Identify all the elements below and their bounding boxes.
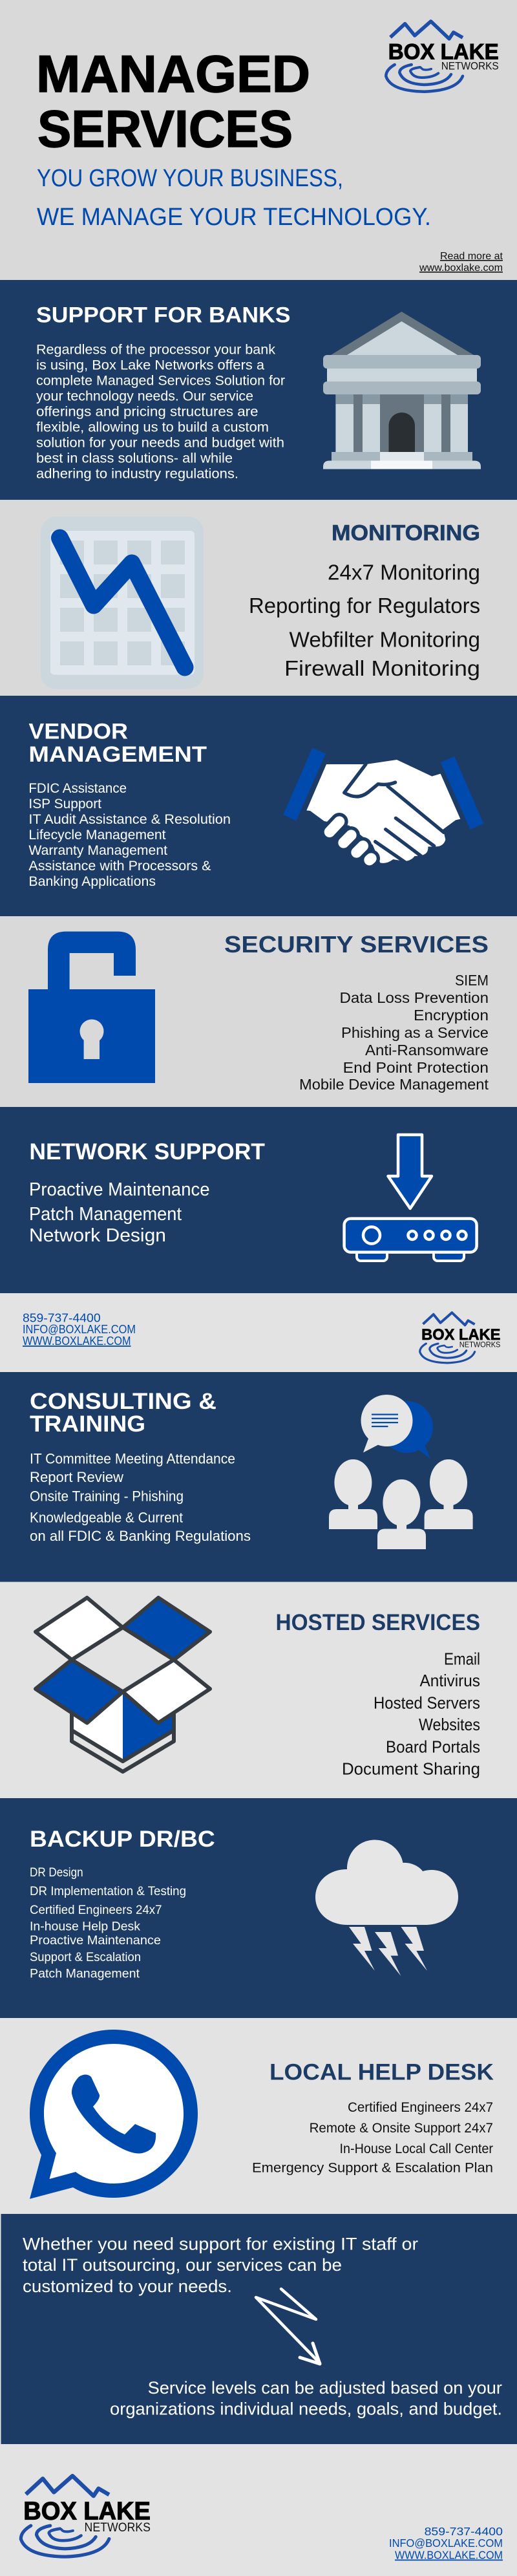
tagline: YOU GROW YOUR BUSINESS, xyxy=(37,165,343,192)
tagline: WE MANAGE YOUR TECHNOLOGY. xyxy=(37,204,431,231)
closing text: customization xyxy=(23,2235,418,2296)
service list: Encryption xyxy=(414,1007,489,1024)
contact details: INFO@BOXLAKE.COM xyxy=(23,1323,136,1336)
body text: offerings and pricing structures are xyxy=(36,405,258,419)
service list: Certified Engineers 24x7 xyxy=(30,1903,162,1917)
icon: router with download arrow xyxy=(344,1135,477,1261)
service list: Data Loss Prevention xyxy=(340,989,489,1006)
service list: Reporting for Regulators xyxy=(249,594,480,618)
panel: footer xyxy=(0,2444,517,2576)
service list: Websites xyxy=(419,1715,480,1734)
service list: Patch Management xyxy=(30,1966,140,1980)
service list: Antivirus xyxy=(420,1671,480,1690)
panel: vendor management xyxy=(0,696,517,916)
service list: Board Portals xyxy=(386,1737,480,1757)
service list xyxy=(30,1451,251,1544)
read more link xyxy=(419,251,503,274)
heading: SECURITY SERVICES xyxy=(224,931,489,958)
service list: In-House Local Call Center xyxy=(340,2141,493,2156)
closing text: service levels: Service levels can be adjusted based on your xyxy=(148,2378,502,2398)
title: SERVICES xyxy=(37,100,293,158)
icon: phone speech bubble xyxy=(30,2030,198,2199)
closing text: customization: customized to your needs. xyxy=(23,2277,232,2296)
logo: Box Lake Networks footer: NETWORKS xyxy=(85,2521,151,2535)
service list: Remote & Onsite Support 24x7 xyxy=(310,2121,493,2136)
service list: Support & Escalation xyxy=(30,1950,141,1964)
icon: handshake xyxy=(283,748,483,863)
heading: NETWORK SUPPORT xyxy=(29,1139,265,1165)
service list: Proactive Maintenance xyxy=(30,1933,161,1948)
panel: support for banks xyxy=(0,280,517,500)
panel: security services xyxy=(0,916,517,1107)
service list: Proactive Maintenance xyxy=(29,1179,209,1200)
service list: Hosted Servers xyxy=(374,1693,480,1712)
logo: Box Lake Networks: NETWORKS xyxy=(441,61,499,72)
closing text: service levels: organizations individual needs, goals, and budget. xyxy=(110,2399,502,2419)
service list: Onsite Training - Phishing xyxy=(30,1488,184,1504)
heading: MONITORING xyxy=(332,521,480,545)
service list: Assistance with Processors & xyxy=(28,859,211,874)
service list: Patch Management xyxy=(29,1204,182,1225)
read more link: Read more at xyxy=(440,251,503,262)
service list: Lifecycle Management xyxy=(28,828,166,843)
service list xyxy=(299,972,489,1093)
panel: local help desk xyxy=(0,2018,517,2214)
logo: Box Lake Networks xyxy=(386,21,499,92)
body text: best in class solutions- all while xyxy=(36,451,233,466)
service list xyxy=(249,561,480,681)
contact details xyxy=(389,2525,503,2562)
contact details: INFO@BOXLAKE.COM xyxy=(389,2537,503,2549)
service list: Warranty Management xyxy=(28,843,167,858)
service list: ISP Support xyxy=(28,797,101,811)
service list: Email xyxy=(444,1649,480,1668)
panel: monitoring xyxy=(0,500,517,696)
logo: Box Lake Networks small xyxy=(420,1313,501,1363)
heading xyxy=(28,720,207,767)
title xyxy=(36,45,310,158)
service list: DR Design xyxy=(30,1865,83,1880)
contact details: 859-737-4400 xyxy=(425,2525,503,2538)
logo: Box Lake Networks: BOX LAKE xyxy=(388,40,499,65)
panel: header xyxy=(0,0,517,280)
service list: IT Audit Assistance & Resolution xyxy=(28,812,231,827)
service list: Banking Applications xyxy=(28,874,156,889)
body text: complete Managed Services Solution for xyxy=(36,374,285,388)
service list xyxy=(252,2100,493,2175)
service list: DR Implementation & Testing xyxy=(30,1884,186,1898)
icon: bank building xyxy=(323,312,481,469)
body text: solution for your needs and budget with xyxy=(36,436,284,450)
body text xyxy=(36,343,285,481)
logo: Box Lake Networks small: NETWORKS xyxy=(459,1341,501,1349)
service list: IT Committee Meeting Attendance xyxy=(30,1451,235,1466)
service list: Knowledgeable & Current xyxy=(30,1509,183,1526)
service list: 24x7 Monitoring xyxy=(328,561,480,585)
body text: is using, Box Lake Networks offers a xyxy=(36,358,264,372)
heading xyxy=(30,1389,216,1437)
service list xyxy=(30,1865,186,1980)
panel: contact strip xyxy=(0,1293,517,1372)
service list: Anti-Ransomware xyxy=(365,1042,489,1058)
icon: people with speech bubbles xyxy=(329,1395,473,1549)
panel: consulting and training xyxy=(0,1372,517,1582)
service list: Emergency Support & Escalation Plan xyxy=(252,2160,493,2175)
service list: Firewall Monitoring xyxy=(284,657,480,681)
closing text: customization: Whether you need support for existing IT staff or xyxy=(23,2235,418,2254)
service list xyxy=(29,1179,209,1246)
contact details: 859-737-4400 xyxy=(23,1311,101,1324)
service list: Mobile Device Management xyxy=(299,1076,489,1093)
service list: on all FDIC & Banking Regulations xyxy=(30,1528,251,1544)
heading: HOSTED SERVICES xyxy=(275,1610,480,1635)
service list: End Point Protection xyxy=(343,1059,489,1076)
tagline xyxy=(37,165,431,231)
icon: falling chart xyxy=(41,517,204,689)
service list xyxy=(342,1649,480,1778)
arrow: zigzag xyxy=(256,2289,320,2364)
heading: VENDOR xyxy=(28,720,128,744)
contact details xyxy=(23,1311,136,1347)
body text: adhering to industry regulations. xyxy=(36,467,238,481)
body text: Regardless of the processor your bank xyxy=(36,343,276,357)
service list: Document Sharing xyxy=(342,1759,480,1778)
service list: Report Review xyxy=(30,1469,123,1485)
contact details: WWW.BOXLAKE.COM xyxy=(395,2549,503,2562)
service list: In-house Help Desk xyxy=(30,1919,140,1933)
panel: closing statement xyxy=(0,2214,517,2444)
service list: Certified Engineers 24x7 xyxy=(348,2100,493,2115)
service list: Phishing as a Service xyxy=(341,1024,489,1041)
read more link: www.boxlake.com xyxy=(419,263,503,274)
service list: SIEM xyxy=(455,972,489,989)
service list: Network Design xyxy=(29,1225,166,1246)
contact details: WWW.BOXLAKE.COM xyxy=(23,1335,131,1347)
body text: your technology needs. Our service xyxy=(36,389,253,403)
heading: LOCAL HELP DESK xyxy=(269,2060,494,2085)
heading: MANAGEMENT xyxy=(28,742,207,767)
body text: flexible, allowing us to build a custom xyxy=(36,420,269,435)
logo: Box Lake Networks footer xyxy=(21,2476,151,2557)
icon: storm cloud xyxy=(315,1840,458,1976)
logo: Box Lake Networks small: BOX LAKE xyxy=(421,1326,500,1344)
heading: SUPPORT FOR BANKS xyxy=(36,303,291,328)
heading: CONSULTING & xyxy=(30,1389,216,1414)
title: MANAGED xyxy=(36,45,310,103)
icon: open box xyxy=(36,1598,210,1772)
closing text: customization: total IT outsourcing, our services can be xyxy=(23,2255,342,2275)
logo: Box Lake Networks footer: BOX LAKE xyxy=(23,2498,151,2526)
icon: open padlock xyxy=(28,932,155,1083)
service list: Webfilter Monitoring xyxy=(290,628,480,652)
heading: TRAINING xyxy=(30,1411,145,1437)
closing text: service levels xyxy=(110,2378,502,2419)
panel: backup dr/bc xyxy=(0,1798,517,2018)
panel: hosted services xyxy=(0,1582,517,1798)
heading: BACKUP DR/BC xyxy=(30,1827,215,1852)
service list: FDIC Assistance xyxy=(28,781,127,796)
panel: network support xyxy=(0,1107,517,1293)
service list xyxy=(28,781,231,889)
